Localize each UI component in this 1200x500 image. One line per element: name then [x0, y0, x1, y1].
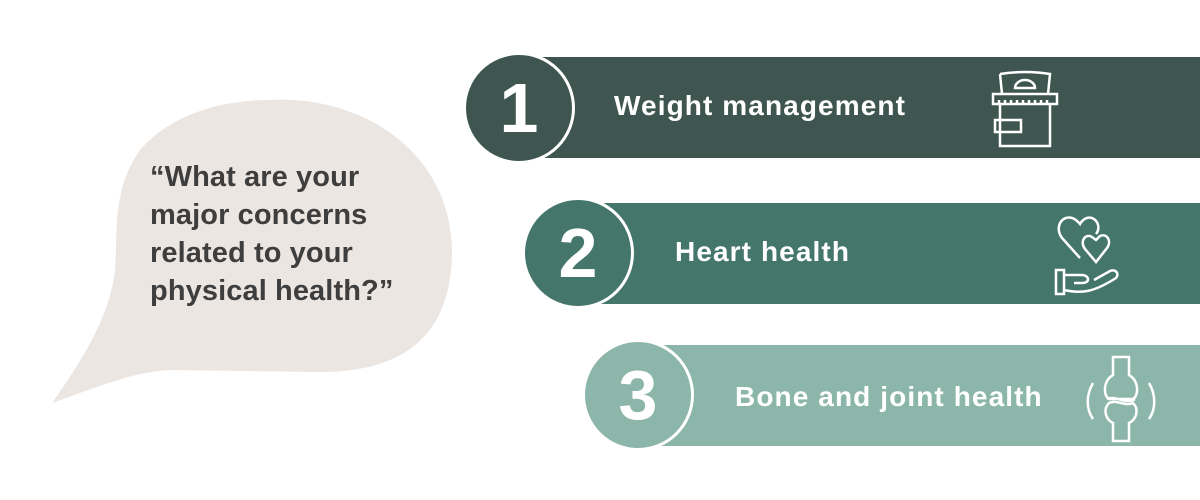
question text: physical health?”	[150, 275, 393, 307]
label 2: Heart health	[675, 236, 850, 267]
item 3	[585, 342, 1200, 448]
item 2	[525, 200, 1200, 306]
label 3: Bone and joint health	[735, 381, 1043, 412]
item 1	[466, 55, 1200, 161]
number 1	[463, 52, 575, 164]
icon: hearts in hand	[1054, 216, 1119, 296]
label 1: Weight management	[614, 90, 906, 121]
question text: major concerns	[150, 199, 367, 231]
question text	[150, 161, 393, 307]
number 3: 3	[619, 356, 657, 434]
icon: knee joint	[1086, 356, 1156, 442]
icon: scale with tape	[992, 70, 1058, 148]
number 2	[522, 197, 634, 309]
number 3	[582, 339, 694, 451]
speech bubble	[52, 100, 452, 403]
question text: related to your	[150, 237, 353, 269]
number 2: 2	[559, 214, 597, 292]
number 1: 1	[500, 69, 538, 147]
question text: “What are your	[150, 161, 359, 193]
